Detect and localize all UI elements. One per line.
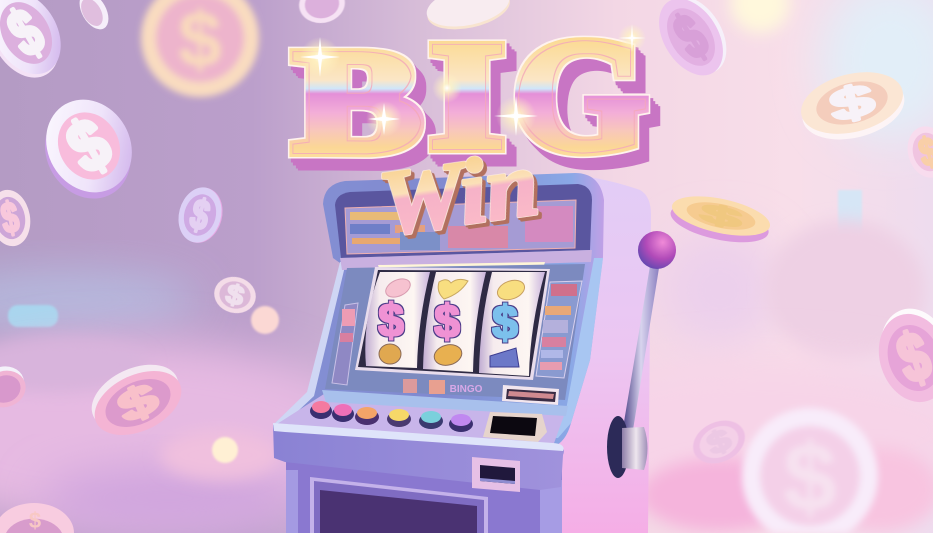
coin top center: [296, 0, 348, 27]
coin top flat: [423, 0, 514, 36]
cabinet frame: [273, 173, 604, 447]
bill slot: [502, 385, 559, 405]
console deck: [277, 394, 566, 446]
coin near lever: $: [698, 197, 744, 234]
coin large left: $: [54, 102, 124, 189]
coin right large: [866, 299, 933, 411]
coin lower right small: $: [702, 422, 736, 462]
coin right edge: [902, 122, 933, 182]
coin right flat: [795, 62, 911, 149]
coin small top: [74, 0, 114, 34]
coin big blurred: [742, 408, 878, 533]
lever: [607, 231, 676, 478]
symbol blue dollar: $: [492, 296, 518, 348]
front bar: [273, 423, 564, 490]
coin top right: [646, 0, 740, 87]
symbols bottom row: [379, 342, 519, 368]
symbols top row: [383, 275, 527, 303]
title: BIG: [294, 6, 647, 184]
reel 1: [365, 272, 430, 368]
reel 2: [423, 272, 486, 372]
lever ball: [638, 231, 676, 269]
coin blurred gold: [141, 0, 259, 97]
light bar: [340, 250, 592, 270]
coin top right: $: [663, 1, 719, 73]
coin bottom left: [0, 503, 74, 533]
reel panel: [325, 264, 585, 400]
coin left edge: [0, 187, 35, 249]
coin bottom left: $: [29, 508, 41, 533]
title: Win: Win: [373, 132, 544, 255]
sparkles: [300, 24, 646, 137]
coin right flat: $: [825, 74, 879, 132]
base cabinet: [286, 455, 562, 533]
coin blurred small: [210, 272, 260, 318]
buttons: [310, 401, 473, 432]
reels window: [355, 267, 550, 380]
coin lower right small: [686, 412, 752, 472]
coin left mid: $: [186, 189, 215, 240]
coin blurred small: $: [223, 278, 247, 312]
coin top left: [0, 0, 76, 90]
symbol pink dollar 2: $: [434, 295, 460, 347]
title: BIG: G: [513, 6, 647, 184]
door: [310, 477, 488, 533]
symbol pink dollar 1: $: [378, 294, 404, 346]
coin lower left edge: [0, 361, 31, 413]
reel 3: [479, 272, 545, 376]
coin tray: [483, 412, 547, 442]
ticket slot: [472, 457, 520, 492]
side panel: [555, 174, 651, 533]
coin large left: [26, 84, 151, 214]
coin lower left: [82, 352, 192, 448]
slot machine: [273, 173, 676, 533]
coin lower left: $: [111, 374, 165, 432]
marquee screen: [335, 184, 592, 258]
title: BIG: B: [294, 20, 422, 184]
coin big blurred: $: [783, 424, 837, 531]
coin left mid: [172, 183, 229, 248]
lever hub: [607, 416, 648, 478]
panel label: BINGO: [450, 384, 483, 395]
coin near lever: [667, 189, 773, 250]
title: BIG: I: [430, 12, 504, 181]
